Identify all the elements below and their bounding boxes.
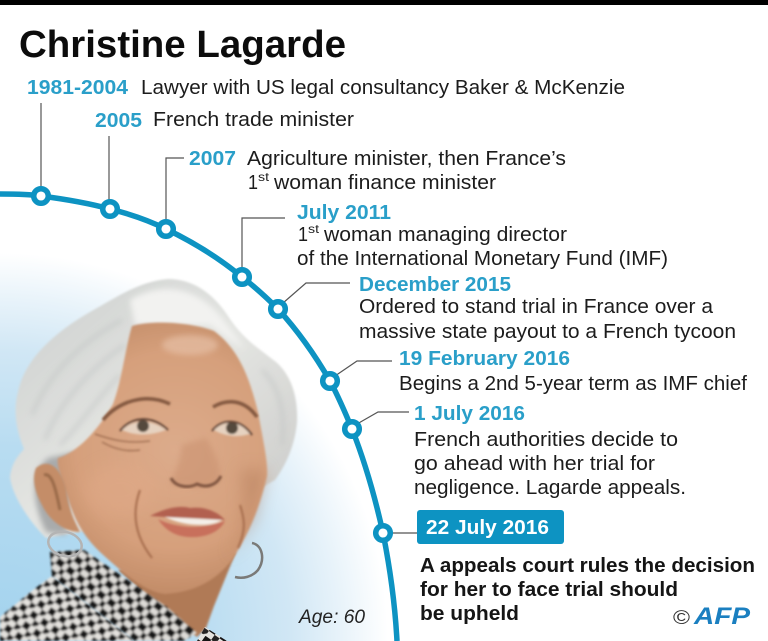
top black bar bbox=[0, 0, 768, 5]
event: 1981-2004: 1981-2004 bbox=[27, 77, 129, 99]
hair back bbox=[10, 279, 297, 538]
event: 2007: Agriculture minister, then France’s bbox=[247, 148, 566, 170]
left earring bbox=[45, 528, 85, 560]
face bbox=[58, 323, 267, 594]
event: 19 February 2016 bbox=[399, 348, 747, 395]
event: December 2015: Ordered to stand trial in France over a bbox=[359, 296, 714, 318]
event: 22 July 2016 date box bbox=[417, 510, 564, 544]
coat right collar bbox=[197, 627, 227, 641]
event: 1 July 2016: 1 July 2016 bbox=[414, 403, 525, 425]
event: 2007: 2007 bbox=[189, 148, 236, 170]
event: 2005: French trade minister bbox=[153, 109, 354, 131]
event: 19 February 2016: 19 February 2016 bbox=[399, 348, 570, 370]
hair shadow above ear bbox=[35, 452, 76, 535]
cheek highlight bbox=[86, 464, 154, 516]
event: 1 July 2016: French authorities decide to bbox=[414, 429, 678, 451]
event: July 2011: of the International Monetary Fund (IMF) bbox=[297, 248, 668, 270]
coat body bbox=[0, 576, 135, 641]
event: 22 July 2016 text: be upheld bbox=[420, 603, 519, 625]
timeline arc bbox=[0, 194, 397, 641]
event: 2007 bbox=[189, 148, 566, 194]
coat collar bbox=[50, 550, 197, 641]
event: July 2011: 1 bbox=[298, 224, 308, 246]
mouth bbox=[150, 507, 225, 537]
event: 22 July 2016 date box: 22 July 2016 bbox=[426, 517, 549, 539]
event: 2007: woman finance minister bbox=[273, 172, 496, 194]
timeline nodes bbox=[34, 189, 390, 540]
event: 1 July 2016 bbox=[414, 403, 686, 499]
event: December 2015: December 2015 bbox=[359, 274, 511, 296]
inner ear shadow bbox=[44, 475, 60, 510]
forehead highlight bbox=[162, 335, 218, 355]
event: 1 July 2016: negligence. Lagarde appeals. bbox=[414, 477, 686, 499]
copyright AFP logo: AFP bbox=[693, 603, 751, 630]
right cheek shadow bbox=[228, 470, 266, 560]
right earring bbox=[235, 543, 262, 578]
copyright AFP logo: © bbox=[673, 608, 690, 629]
hair left strands bbox=[32, 320, 283, 445]
title: Christine Lagarde bbox=[19, 24, 346, 66]
event: 1 July 2016: go ahead with her trial for bbox=[414, 453, 655, 475]
right eye bbox=[212, 422, 252, 436]
event: 19 February 2016: Begins a 2nd 5-year term as IMF chief bbox=[399, 373, 747, 395]
event: July 2011: July 2011 bbox=[297, 202, 391, 224]
event: 2005: 2005 bbox=[95, 110, 142, 132]
smile lines bbox=[136, 490, 244, 558]
eyebrows bbox=[103, 399, 257, 420]
event: 22 July 2016 text bbox=[420, 555, 755, 625]
event: December 2015 bbox=[359, 274, 736, 343]
event: 2007: 1 bbox=[248, 172, 258, 194]
blue gradient background behind portrait bbox=[0, 250, 392, 641]
nose bbox=[172, 438, 220, 487]
portrait photo bbox=[0, 279, 297, 641]
event: July 2011: st bbox=[308, 222, 320, 236]
event: 1981-2004: Lawyer with US legal consultancy Baker & McKenzie bbox=[141, 77, 625, 99]
age label: Age: 60 bbox=[298, 607, 365, 628]
copyright AFP logo bbox=[673, 603, 751, 630]
event: 2007: st bbox=[258, 170, 270, 184]
event: 2005 bbox=[95, 109, 354, 132]
event: July 2011 bbox=[297, 202, 668, 270]
left eye bbox=[120, 419, 168, 434]
leader lines bbox=[41, 103, 418, 533]
event: December 2015: massive state payout to a French tycoon bbox=[359, 321, 736, 343]
hair top highlight bbox=[130, 289, 245, 350]
event: July 2011: woman managing director bbox=[323, 224, 567, 246]
eye wrinkles bbox=[95, 434, 150, 451]
neck bbox=[118, 552, 236, 637]
event: 22 July 2016 text: for her to face trial should bbox=[420, 579, 678, 601]
ear bbox=[34, 464, 80, 532]
event: 22 July 2016 text: A appeals court rules the decision bbox=[420, 555, 755, 577]
